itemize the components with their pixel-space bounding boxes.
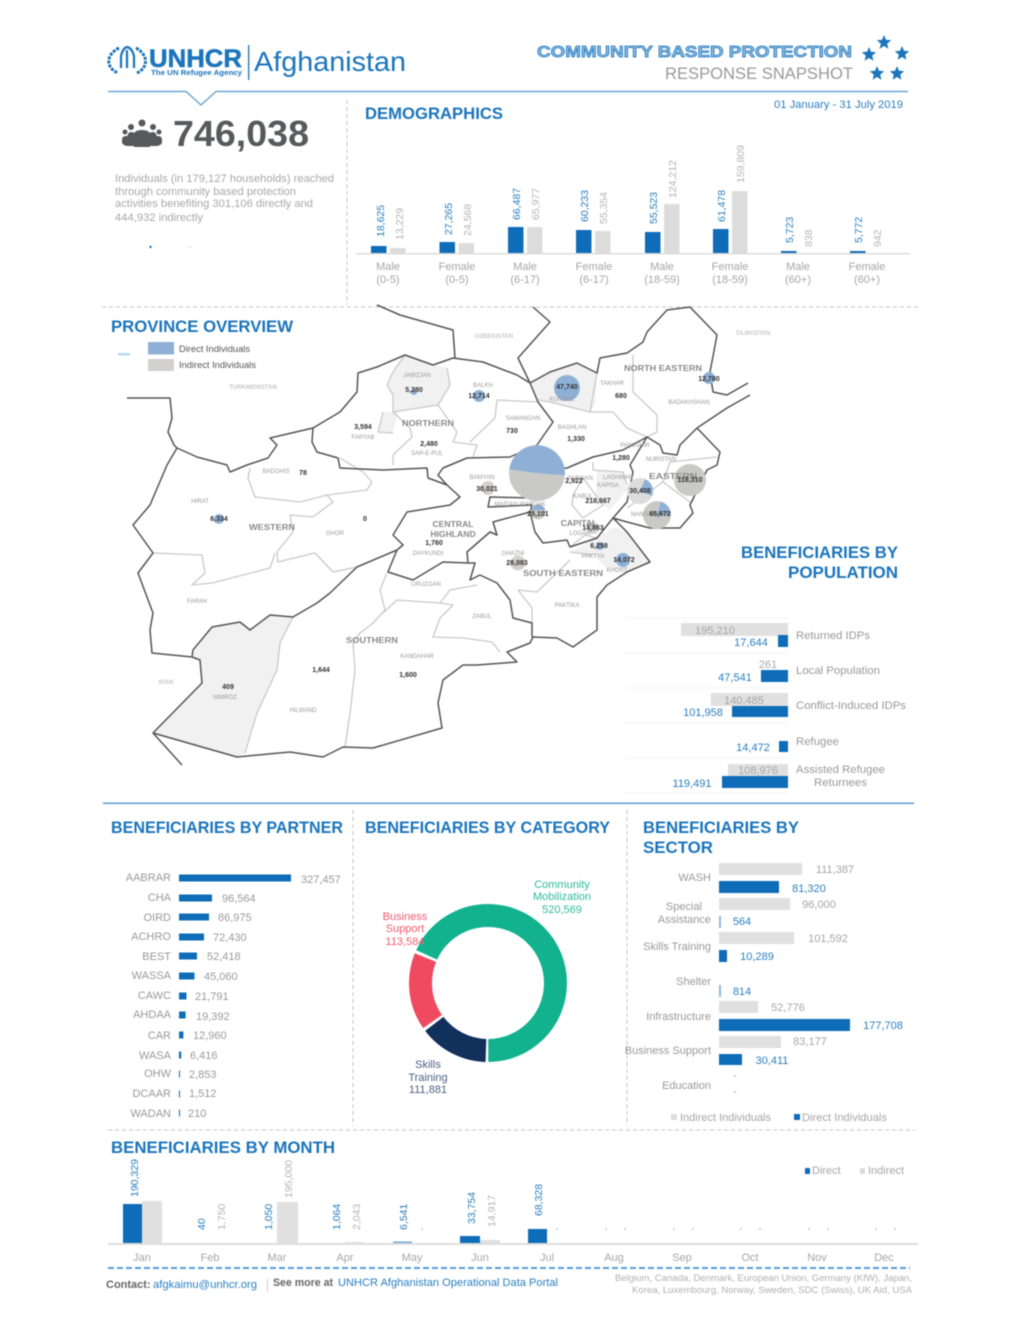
bar chart: partners: 72,430 [213,932,247,944]
bar chart: months: 6,541 [398,1204,410,1230]
bar chart: sectors: 814 [733,986,751,998]
map: province values: 28,083 [506,560,528,567]
map: province labels: NURISTAN [646,457,676,463]
donut label: skills training [408,1059,448,1096]
panel: beneficiaries by partner [111,819,343,1120]
map: region labels: HIGHLAND [430,529,476,539]
map: province labels: JAWZJAN [403,373,431,379]
donut label: skills training: 111,881 [409,1084,447,1096]
donut label: skills training: Training [408,1072,448,1084]
bar chart: demographics: (60+) [854,274,880,286]
bar chart: sectors: 30,411 [756,1055,788,1067]
heading: BENEFICIARIES BY CATEGORY [365,819,610,837]
map: province labels: LAGHMAN [603,475,633,481]
bar chart: demographics: 18,625 [375,205,387,237]
description text: Individuals (in 179,127 households) reached [115,173,334,185]
description text [115,173,334,224]
map: region labels: WESTERN [249,522,295,532]
bar chart: partners: 96,564 [222,893,256,905]
bar chart: months: Mar [268,1252,287,1264]
description text: through community based protection [115,186,296,198]
bar chart: demographics: 124,212 [667,160,679,198]
map: province values: 47,740 [556,384,578,391]
bar chart: partners: 21,791 [195,991,229,1003]
donut label: business support [383,911,428,948]
map: province labels: NANGARHAR [631,512,670,518]
bar chart: sectors: Special [666,901,702,913]
map: province labels: LOGAR [569,531,591,537]
bar chart: months: Sep [672,1252,692,1264]
map: province labels: DAYKUNDI [413,551,444,557]
map: province labels: PARWAN [567,476,593,482]
bar chart: sectors: Skills Training [643,941,711,953]
date range: 01 January - 31 July 2019 [774,99,903,111]
bar chart: demographics: (6-17) [510,274,540,286]
map: province values [210,376,720,691]
bar chart: population: 119,491 [673,778,711,790]
heading: BENEFICIARIES BY MONTH [111,1139,335,1157]
map: province labels: SAMANGAN [506,416,540,422]
bar chart: sectors: 10,289 [740,951,774,963]
bar chart: sectors: 564 [733,916,751,928]
bar chart: partners: 19,392 [196,1011,230,1023]
heading: BENEFICIARIES BY PARTNER [111,819,343,837]
bar chart: demographics: 66,487 [511,188,523,220]
footer: donors [615,1273,913,1296]
bar chart: sectors: 111,387 [816,864,854,876]
bar chart: sectors: 101,592 [808,933,848,945]
bar chart: demographics: 55,354 [598,192,610,224]
map: province labels: BAMYAN [470,475,494,481]
bar chart: partners [126,872,341,1120]
bar chart: months: May [402,1252,423,1264]
heading: DEMOGRAPHICS [365,105,503,123]
bar chart: population [625,618,907,793]
bar chart: population: 261 [759,659,777,671]
map: country labels: IRAN [159,680,173,686]
panel: beneficiaries by category [365,819,610,1096]
donut label: skills training: Skills [415,1059,441,1071]
country name: Afghanistan [254,46,406,77]
donut label: business support: 113,584 [386,936,424,948]
bar chart: population: Local Population [796,665,880,677]
bar chart: partners: BEST [142,951,171,963]
map: province labels: URUZGAN [411,582,441,588]
bar chart: demographics: Male [650,261,674,273]
bar chart: demographics: 24,568 [462,204,474,236]
map: province values: 0 [363,516,367,523]
panel: beneficiaries by population [625,544,907,793]
bar chart: months: 14,917 [486,1195,498,1227]
footer: contact and links [106,1277,558,1292]
bar chart: demographics: (60+) [785,274,811,286]
bar chart: sectors: 83,177 [793,1036,827,1048]
bar chart: partners: WASSA [132,970,172,982]
bar chart: partners: ACHRO [131,931,171,943]
bar chart: population: 101,958 [683,707,723,719]
map: province values: 25,101 [527,511,549,518]
map: province labels: BADAKHSHAN [668,400,710,406]
bar chart: sectors: - [733,1070,737,1082]
bar chart: partners: 45,060 [204,971,238,983]
map: region labels: NORTHERN [402,418,454,428]
section divider [103,802,914,804]
bar chart: months: Feb [201,1252,219,1264]
bar chart: population: 14,472 [736,742,770,754]
bar chart: population: 108,976 [738,765,778,777]
map: province labels: NIMROZ [213,695,237,701]
map: province values: 1,760 [425,540,443,547]
bar chart: months: 1,064 [331,1204,343,1230]
heading: BENEFICIARIES BY [741,544,898,562]
bar chart: months: Dec [874,1252,894,1264]
map: province values: 12,714 [468,393,490,400]
sector legend: Indirect Individuals [680,1112,771,1124]
map: province labels: BAGHLAN [558,425,586,431]
bar chart: partners: 86,975 [218,912,252,924]
map: province labels: BALKH [473,383,493,389]
map: province labels: GHOR [326,531,345,537]
bar chart: population: Refugee [796,736,839,748]
title line one: COMMUNITY BASED PROTECTION [537,44,852,61]
bar chart: months [108,1159,918,1264]
bar chart: population: 47,541 [718,672,752,684]
bar chart: demographics: Male [513,261,537,273]
bar chart: sectors: Education [662,1080,711,1092]
icon: stars [862,35,909,80]
map: province values: 409 [222,684,234,691]
map: province values: 30,408 [629,488,651,495]
bar chart: partners: CHA [148,892,172,904]
donut label: community mobilization: Community [534,879,590,891]
map: region labels: SOUTHERN [346,635,398,645]
bar chart: sectors: Assistance [658,914,711,926]
panel: beneficiaries by sector [625,819,903,1124]
bar chart: demographics: 60,233 [579,190,591,222]
bar chart: months: Oct [741,1252,759,1264]
bar chart: months: Jun [471,1252,489,1264]
map: province labels: PAKTIKA [555,603,579,609]
bar chart: months: Aug [604,1252,624,1264]
map: province labels: KAPISA [597,483,619,489]
bar chart: months: 68,328 [533,1184,545,1216]
map: region labels: NORTH EASTERN [624,363,702,373]
map: country labels: UZBEKISTAN [475,334,513,340]
heading: PROVINCE OVERVIEW [111,318,293,336]
bar chart: partners: OIRD [144,912,171,924]
bar chart: partners: 210 [188,1108,206,1120]
sector legend [671,1112,887,1124]
map legend [118,342,256,371]
logo tagline: The UN Refugee Agency [151,70,242,77]
map: province values: 2,922 [565,478,583,485]
logo wordmark: UNHCR [149,45,242,73]
map: province values: 1,644 [312,667,330,674]
map: province values: 1,330 [567,436,585,443]
bar chart: partners: 6,416 [190,1050,218,1062]
month legend: Direct [812,1165,841,1177]
map: province values: 218,667 [585,498,611,505]
map: country labels: TURKMENISTAN [229,385,277,391]
bar chart: partners: 2,853 [189,1069,217,1081]
map: region labels: SOUTH EASTERN [523,568,603,578]
bar chart: partners: AHDAA [133,1009,172,1021]
map: region labels: CAPITAL [561,518,597,528]
bar chart: partners: 12,960 [193,1030,227,1042]
bar chart: sectors: 177,708 [863,1020,903,1032]
map: province values: 14,072 [613,557,635,564]
donut label: business support: Business [383,911,428,923]
heading: SECTOR [643,839,713,857]
bar chart: population: 195,210 [695,625,735,637]
map: province boundaries [153,355,717,753]
map: province values: 680 [615,393,627,400]
bar chart: demographics: Female [849,261,885,273]
bar chart: demographics: (6-17) [579,274,609,286]
contact: Contact: [106,1279,151,1291]
bar chart: demographics: (0-5) [376,274,400,286]
bar chart: months: 195,000 [283,1160,295,1198]
map: province labels: HIRAT [191,499,209,505]
heading: POPULATION [788,564,898,582]
map: province labels: PAKTYA [582,554,604,560]
donut label: business support: Support [386,923,424,935]
bar chart: population: Returnees [814,777,868,789]
bar chart: population: Conflict-Induced IDPs [796,700,907,712]
bar chart: demographics: 65,977 [530,188,542,220]
bar chart: demographics: 55,523 [648,192,660,224]
map: province values: 1,280 [612,455,630,462]
heading [643,819,799,857]
month legend [805,1165,904,1177]
map: country labels [159,331,770,686]
bar chart: demographics: Female [712,261,748,273]
panel: beneficiaries by month [108,1139,918,1264]
bar chart: demographics: (18-59) [712,274,748,286]
bar chart: sectors [625,863,903,1098]
map legend: Indirect Individuals [179,360,256,371]
map: province labels: PANJSHIR [620,443,650,449]
map: province values: 6,334 [210,516,228,523]
bar chart: demographics: 27,265 [443,203,455,235]
icon: people [122,120,162,147]
description text: activities benefiting 301,106 directly and [115,198,313,210]
data portal link: See more at [273,1277,333,1289]
map: province labels: KUNDUZ [550,397,575,403]
bar chart: population: Returned IDPs [796,630,871,642]
bar chart: demographics: 13,229 [394,208,406,240]
map: province values: 118,310 [678,477,703,484]
sector legend: Direct Individuals [802,1112,887,1124]
bar chart: sectors: - [733,1086,737,1098]
bar chart: demographics: Female [576,261,612,273]
bar chart: months: Jan [133,1252,151,1264]
bar chart: months: 40 [196,1218,208,1230]
bar chart: partners: WASA [139,1050,172,1062]
map: province labels: KANDAHAR [400,654,434,660]
map: province values: 730 [506,428,518,435]
bar chart: partners: WADAN [130,1108,171,1120]
bar chart: sectors: Infrastructure [646,1011,711,1023]
bar chart: months: 33,754 [466,1192,478,1224]
map: province labels: KABUL [573,494,593,500]
heading: BENEFICIARIES BY [643,819,799,837]
map: province values: 6,258 [590,543,608,550]
header rule with notch [108,92,908,105]
footer: contact and links: UNHCR Afghanistan Operational Data Portal [338,1277,558,1289]
bar chart: demographics [356,145,910,286]
map: province values: 5,280 [405,387,423,394]
map: province labels: KHOST [607,568,628,574]
donut label: community mobilization: 520,569 [542,904,582,916]
map: province values: 14,863 [582,525,604,532]
map: province values: 1,600 [399,672,417,679]
bar chart: months: Jul [540,1252,554,1264]
panel: province overview map [111,305,770,765]
map: province labels: ZABUL [472,614,492,620]
bar chart: demographics: 5,772 [853,217,865,243]
bar chart: demographics: Female [439,261,475,273]
bar chart: demographics: 5,723 [784,217,796,243]
footer: contact and links: afgkaimu@unhcr.org [153,1279,257,1291]
map: proportional circles [214,372,715,570]
bar chart: partners: 1,512 [189,1088,217,1100]
bar chart: partners: CAWC [138,990,171,1002]
icon: UNHCR emblem [109,47,146,73]
bar chart: months: 1,750 [216,1204,228,1230]
map: province values: 3,594 [354,424,372,431]
bar chart: demographics: Male [786,261,810,273]
map: shaded provinces [153,355,650,757]
map: national and regional boundaries [127,305,750,765]
map: province labels: GHAZNI [502,551,525,557]
bar chart: demographics: 61,478 [716,190,728,222]
map: province labels: BADGHIS [262,469,290,475]
bar chart: partners: AABRAR [126,872,171,884]
map legend: Direct Individuals [179,344,250,355]
bar chart: demographics: 942 [872,229,884,247]
bar chart: sectors: WASH [678,872,711,884]
bar chart: sectors: Shelter [676,976,711,988]
bar chart: sectors: 52,776 [771,1002,805,1014]
map: country labels: TAJIKISTAN [736,331,770,337]
report title [537,44,853,83]
footer: donors: Korea, Luxembourg, Norway, Sweden, SDC (Swiss), UK Aid, USA [632,1285,913,1296]
map: region labels: CENTRAL [432,519,474,529]
bar chart: sectors: 96,000 [802,899,836,911]
map: province values: 12,780 [698,376,720,383]
bar chart: demographics: Male [376,261,400,273]
map: province labels: HILMAND [289,708,317,714]
bar chart: months: 1,050 [263,1204,275,1230]
map: province labels: SAR-E-PUL [411,451,444,457]
bar chart: demographics: 838 [803,229,815,247]
panel: demographics [356,99,910,286]
bar chart: partners: 327,457 [301,874,341,886]
bar chart: demographics: 159,809 [735,145,747,183]
bar chart: sectors: 81,320 [792,883,826,895]
title line two: RESPONSE SNAPSHOT [665,64,853,83]
bar chart: months: Nov [807,1252,827,1264]
map: province labels [187,373,710,714]
bar chart: partners: OHW [144,1068,172,1080]
bar chart: sectors: Business Support [625,1045,711,1057]
map: province values: 65,672 [649,511,671,518]
bar chart: partners: DCAAR [132,1088,171,1100]
description text: 444,932 indirectly [115,212,203,224]
map: province labels: FARYAB [351,435,375,441]
donut chart: category [420,916,556,1050]
panel: headline total [115,113,334,248]
map: province labels: FARAH [187,599,207,605]
map: province values: 2,480 [420,441,438,448]
total number: 746,038 [173,113,309,154]
map: region labels: EASTERN [649,471,697,481]
map: province labels: TAKHAR [600,381,625,387]
bar chart: population: 140,485 [724,695,764,707]
circle: largest province pie [509,445,565,501]
footer: donors: Belgium, Canada, Denmark, European Union, Germany (KfW), Japan, [615,1273,912,1284]
bar chart: demographics: (0-5) [445,274,469,286]
dashed dividers [102,100,918,1130]
map: province values: 78 [299,470,307,477]
donut label: community mobilization: Mobilization [533,891,591,903]
bar chart: months: 2,043 [351,1204,363,1230]
map: province values: 30,021 [476,486,498,493]
heading [741,544,898,582]
bar chart: partners: CAR [148,1030,171,1042]
header: UNHCR logo and country name [109,45,406,80]
bar chart: population: Assisted Refugee [796,764,885,776]
month legend: Indirect [868,1165,904,1177]
donut label: community mobilization [533,879,591,916]
map: region labels [249,363,702,645]
bar chart: partners: 52,418 [207,951,241,963]
bar chart: population: 17,644 [734,637,768,649]
footer dashed rule [108,1267,910,1269]
bar chart: demographics: (18-59) [644,274,680,286]
bar chart: months: Apr [336,1252,354,1264]
bar chart: months: 190,329 [129,1159,141,1197]
map: province labels: MAIDAN WARDAK [494,502,546,508]
